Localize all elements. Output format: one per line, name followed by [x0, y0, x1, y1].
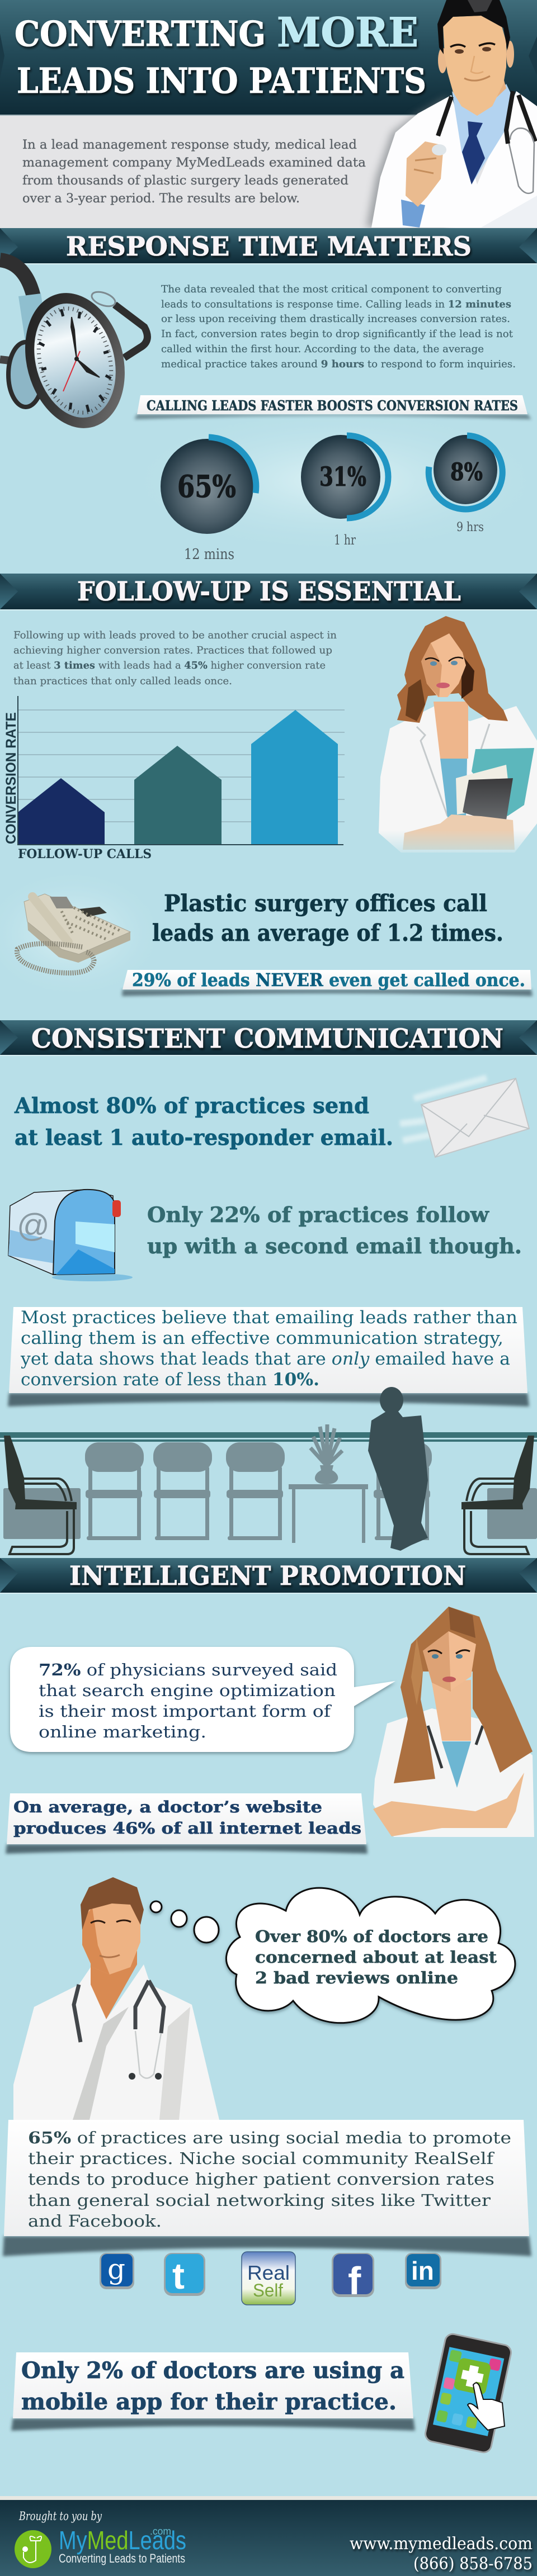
table — [289, 1484, 368, 1543]
facial features — [428, 1650, 470, 1654]
face — [82, 1898, 140, 1974]
hair — [397, 616, 508, 723]
response time text: The data revealed that the most critical component to converting — [161, 283, 502, 295]
donut chart: 65% at 12 mins: 65% — [177, 468, 236, 504]
response time text: leads to consultations is response time. Calling leads in 12 minutes — [161, 299, 511, 310]
title: MORE — [277, 8, 418, 56]
brought to you by: Brought to you by — [18, 2509, 102, 2523]
ribbon: mobile app — [11, 2352, 415, 2431]
ribbon: mobile app: mobile app for their practice. — [21, 2389, 397, 2415]
callout: emailing vs calling: calling them is an effective communication strategy, — [21, 1328, 503, 1348]
coat — [373, 1708, 534, 1837]
speech bubble: search engine optimization: is their most important form of — [39, 1702, 332, 1721]
crossed arms — [373, 1773, 524, 1836]
stat: average calls: leads an average of 1.2 times. — [152, 920, 503, 946]
stethoscope — [428, 1726, 483, 1768]
logo wordmark: MyMedLeads — [59, 2526, 186, 2555]
stat: auto-responder email: at least 1 auto-responder email. — [15, 1125, 393, 1150]
face — [423, 1631, 476, 1692]
donut chart: 8% at 9 hrs: 9 hrs — [456, 520, 484, 534]
thought bubble: bad reviews: concerned about at least — [255, 1948, 497, 1967]
icon: linkedin — [405, 2253, 441, 2289]
footer: .com — [150, 2526, 171, 2537]
icon: facebook — [332, 2253, 374, 2303]
intro text — [22, 138, 366, 206]
response time text: medical practice takes around 9 hours to respond to form inquiries. — [161, 358, 516, 370]
header band — [0, 0, 537, 116]
ribbon: calling leads faster — [134, 395, 531, 419]
icon: google — [100, 2253, 134, 2289]
section banner: follow-up is essential — [0, 574, 537, 610]
thought bubble: bad reviews: 2 bad reviews online — [255, 1968, 458, 1987]
speech bubble: search engine optimization — [10, 1647, 395, 1752]
donut chart: 65% at 12 mins — [161, 437, 256, 563]
donut chart: 65% at 12 mins: 12 mins — [184, 546, 234, 563]
glow behind donut charts — [117, 405, 537, 556]
title — [15, 8, 426, 101]
contact — [350, 2534, 533, 2574]
top — [440, 759, 467, 817]
response time text: or less upon receiving them drastically increases conversion rates. — [161, 313, 510, 325]
response time text: In fact, conversion rates begin to drop significantly if the lead is not — [161, 328, 514, 340]
stat: second email — [147, 1202, 522, 1258]
stat: auto-responder email: Almost 80% of practices send — [14, 1093, 369, 1118]
icon: realself: Real — [247, 2261, 290, 2284]
title: LEADS INTO PATIENTS — [17, 60, 426, 101]
grey chair 4 — [373, 1442, 432, 1540]
callout: social media: and Facebook. — [28, 2212, 162, 2231]
response time text: called within the first hour. According to the data, the average — [161, 343, 484, 355]
follow-up text: Following up with leads proved to be another crucial aspect in — [13, 629, 337, 641]
waiting room scene — [0, 1387, 537, 1554]
glow behind telephone — [0, 866, 168, 1001]
section banner: intelligent promotion: INTELLIGENT PROMOTION — [69, 1561, 466, 1592]
donut chart: 31% at 1 hr: 1 hr — [334, 532, 356, 548]
eyes and lips — [425, 657, 463, 661]
intro text: management company MyMedLeads examined data — [22, 156, 366, 170]
ribbon: website leads: produces 46% of all internet leads — [13, 1819, 361, 1838]
icon: google: g — [107, 2253, 125, 2285]
grey chair 3 — [226, 1442, 285, 1540]
speech bubble: search engine optimization: 72% of physicians surveyed said — [39, 1660, 337, 1679]
follow-up text — [13, 629, 337, 687]
donut chart: 8% at 9 hrs — [428, 435, 502, 534]
icon: smartphone with medical app — [424, 2333, 512, 2454]
icon: twitter: t — [172, 2255, 185, 2296]
title: CONVERTING — [15, 13, 266, 54]
grey chair 1 — [85, 1442, 144, 1540]
callout: social media — [3, 2120, 531, 2256]
stat: second email: Only 22% of practices follow — [147, 1202, 489, 1227]
shirt — [442, 1741, 471, 1788]
bar chart: conversion rate by follow-up calls — [3, 696, 345, 861]
neck — [434, 702, 468, 759]
hair — [437, 0, 510, 54]
illustration: thinking male doctor — [13, 1877, 219, 2120]
stat: average calls: Plastic surgery offices call — [164, 890, 487, 917]
bar chart: conversion rate by follow-up calls: FOLLOW-UP CALLS — [18, 847, 152, 861]
thought bubble: bad reviews: Over 80% of doctors are — [255, 1927, 488, 1946]
grey chair 2 — [153, 1442, 212, 1540]
donut chart: 31% at 1 hr — [301, 435, 388, 548]
stethoscope — [438, 91, 535, 144]
footer — [0, 2496, 537, 2576]
callout: emailing vs calling — [8, 1307, 529, 1407]
seated person silhouette — [368, 1387, 428, 1551]
logo mark — [15, 2530, 51, 2568]
neck and chest — [432, 1680, 471, 1741]
callout: social media: their practices. Niche social community RealSelf — [28, 2149, 495, 2168]
black chair right — [461, 1436, 534, 1554]
facial features — [450, 43, 495, 47]
donut chart: 31% at 1 hr: 31% — [319, 462, 366, 493]
section banner: intelligent promotion — [0, 1558, 537, 1594]
icon: realself — [242, 2252, 295, 2305]
coat — [13, 1964, 219, 2120]
icon: realself: Self — [253, 2280, 283, 2300]
stat: auto-responder email — [14, 1093, 393, 1150]
illustration: female doctor with books — [375, 616, 537, 861]
books — [472, 748, 534, 816]
plant — [310, 1424, 342, 1484]
callout: emailing vs calling: conversion rate of less than 10%. — [21, 1370, 319, 1390]
icon: stethoscope clock — [0, 260, 147, 439]
stethoscope — [74, 1981, 164, 2042]
bar chart: conversion rate by follow-up calls: CONVERSION RATE — [3, 712, 19, 844]
callout: social media: tends to produce higher patient conversion rates — [28, 2170, 494, 2189]
callout: emailing vs calling: yet data shows that leads that are only emailed have a — [20, 1349, 510, 1369]
follow-up text: at least 3 times with leads had a 45% higher conversion rate — [13, 660, 326, 671]
ribbon: website leads — [6, 1793, 368, 1854]
icon: flying envelope — [400, 1078, 529, 1157]
hands — [403, 815, 515, 850]
illustration: long-haired female doctor — [373, 1607, 534, 1837]
side tables — [3, 1488, 81, 1539]
tie — [462, 121, 485, 184]
ribbon: never called: 29% of leads NEVER even get called once. — [132, 969, 525, 991]
speech bubble: search engine optimization: online marketing. — [39, 1722, 206, 1741]
intro panel — [0, 116, 537, 228]
follow-up text: than practices that only called leads once. — [13, 675, 232, 687]
wall rails — [0, 1432, 537, 1438]
intro text: over a 3-year period. The results are below. — [22, 192, 300, 206]
icon: linkedin: in — [411, 2256, 434, 2285]
speech bubble: search engine optimization: that search engine optimization — [39, 1681, 336, 1700]
stat: average calls — [152, 890, 503, 946]
thought bubble: bad reviews — [150, 1888, 515, 2023]
neck and face — [453, 78, 506, 116]
coat — [379, 706, 537, 853]
icon: desk telephone — [17, 894, 130, 973]
shirt — [452, 84, 513, 184]
response time text — [161, 283, 516, 370]
ribbon: mobile app: Only 2% of doctors are using a — [21, 2357, 404, 2384]
icon: mailbox — [8, 1190, 133, 1281]
tagline: Converting Leads to Patients — [59, 2551, 185, 2565]
stat: second email: up with a second email though. — [147, 1234, 522, 1258]
facial features — [91, 1920, 131, 1923]
intro text: In a lead management response study, medical lead — [22, 138, 357, 152]
callout: social media: 65% of practices are using social media to promote — [28, 2128, 511, 2147]
ribbon: website leads: On average, a doctor’s website — [13, 1798, 322, 1816]
callout: social media: than general social networking sites like Twitter — [28, 2191, 491, 2210]
section banner: response time matters: RESPONSE TIME MATTERS — [66, 231, 472, 262]
section banner: follow-up is essential: FOLLOW-UP IS ESSENTIAL — [77, 576, 461, 607]
intro text: from thousands of plastic surgery leads generated — [22, 174, 348, 188]
section banner: response time matters — [0, 228, 537, 264]
illustration: male doctor in header — [366, 0, 537, 228]
sleeve and hand — [401, 200, 425, 228]
hair — [81, 1877, 144, 1930]
icon: mailbox: @ — [17, 1208, 50, 1244]
white coat — [371, 91, 537, 228]
section banner: consistent communication: CONSISTENT COMMUNICATION — [31, 1024, 503, 1054]
face — [421, 633, 466, 697]
icon: twitter — [164, 2253, 205, 2296]
icon: facebook: f — [348, 2259, 361, 2303]
callout: emailing vs calling: Most practices believe that emailing leads rather than — [21, 1308, 517, 1328]
neck — [91, 1951, 137, 2019]
hair — [394, 1607, 533, 1783]
follow-up text: achieving higher conversion rates. Practices that followed up — [13, 645, 332, 656]
black chair left — [4, 1436, 77, 1554]
donut chart: 8% at 9 hrs: 8% — [450, 458, 483, 486]
